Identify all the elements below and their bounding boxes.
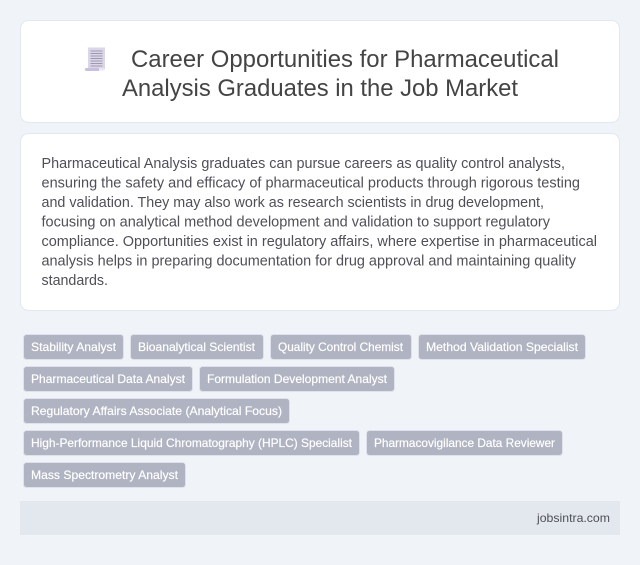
text block: description paragraph: standards. xyxy=(42,273,108,289)
footer source text: jobsintra.com xyxy=(536,511,610,525)
tag: Stability Analyst xyxy=(24,334,124,360)
text block: description paragraph: and validation. They may also work as research scientists in drug development, xyxy=(42,195,544,211)
tag: Quality Control Chemist xyxy=(270,334,412,360)
tag: Method Validation Specialist: Method Validation Specialist xyxy=(426,340,579,354)
tag: Regulatory Affairs Associate: Regulatory Affairs Associate (Analytical Focus) xyxy=(31,404,282,418)
tag: Pharmacovigilance Data Reviewer xyxy=(366,430,562,456)
text block: description paragraph: focusing on analytical method development and validation to support regulatory xyxy=(42,214,551,230)
text block: description paragraph: ensuring the safety and efficacy of pharmaceutical products through rigorous testing xyxy=(42,176,580,192)
panel: header xyxy=(20,20,620,122)
text block: description paragraph: compliance. Opportunities exist in regulatory affairs, where expertise in pharmaceutical xyxy=(42,234,597,250)
text block: description paragraph xyxy=(42,156,597,289)
tag: Mass Spectrometry Analyst: Mass Spectrometry Analyst xyxy=(31,468,179,482)
tag: Formulation Development Analyst: Formulation Development Analyst xyxy=(207,372,388,386)
tag: Bioanalytical Scientist xyxy=(130,334,264,360)
tag: Mass Spectrometry Analyst xyxy=(24,462,186,488)
tag: Quality Control Chemist: Quality Control Chemist xyxy=(278,340,404,354)
tag: HPLC Specialist: High-Performance Liquid Chromatography (HPLC) Specialist xyxy=(31,436,353,450)
tag: Formulation Development Analyst xyxy=(200,366,394,392)
tag: Pharmacovigilance Data Reviewer: Pharmacovigilance Data Reviewer xyxy=(374,436,555,450)
text block: description paragraph: analysis helps in preparing documentation for drug approval and maintaining quality xyxy=(42,254,577,270)
heading: Analysis Graduates in the Job Market xyxy=(122,75,518,102)
heading xyxy=(122,46,559,102)
tag: Stability Analyst: Stability Analyst xyxy=(31,340,117,354)
tag: Method Validation Specialist xyxy=(418,334,586,360)
heading: Career Opportunities for Pharmaceutical xyxy=(131,46,559,73)
tag list: job titles xyxy=(24,334,586,488)
tag: Regulatory Affairs Associate xyxy=(24,398,290,424)
icon: document scroll xyxy=(85,48,105,71)
tag: Pharmaceutical Data Analyst xyxy=(24,366,192,392)
panel: description xyxy=(20,134,620,310)
tag: Pharmaceutical Data Analyst: Pharmaceutical Data Analyst xyxy=(31,372,186,386)
tag: Bioanalytical Scientist: Bioanalytical Scientist xyxy=(138,340,256,354)
text block: description paragraph: Pharmaceutical Analysis graduates can pursue careers as quality control analysts, xyxy=(42,156,565,172)
footer xyxy=(20,501,620,535)
tag: HPLC Specialist xyxy=(24,430,360,456)
